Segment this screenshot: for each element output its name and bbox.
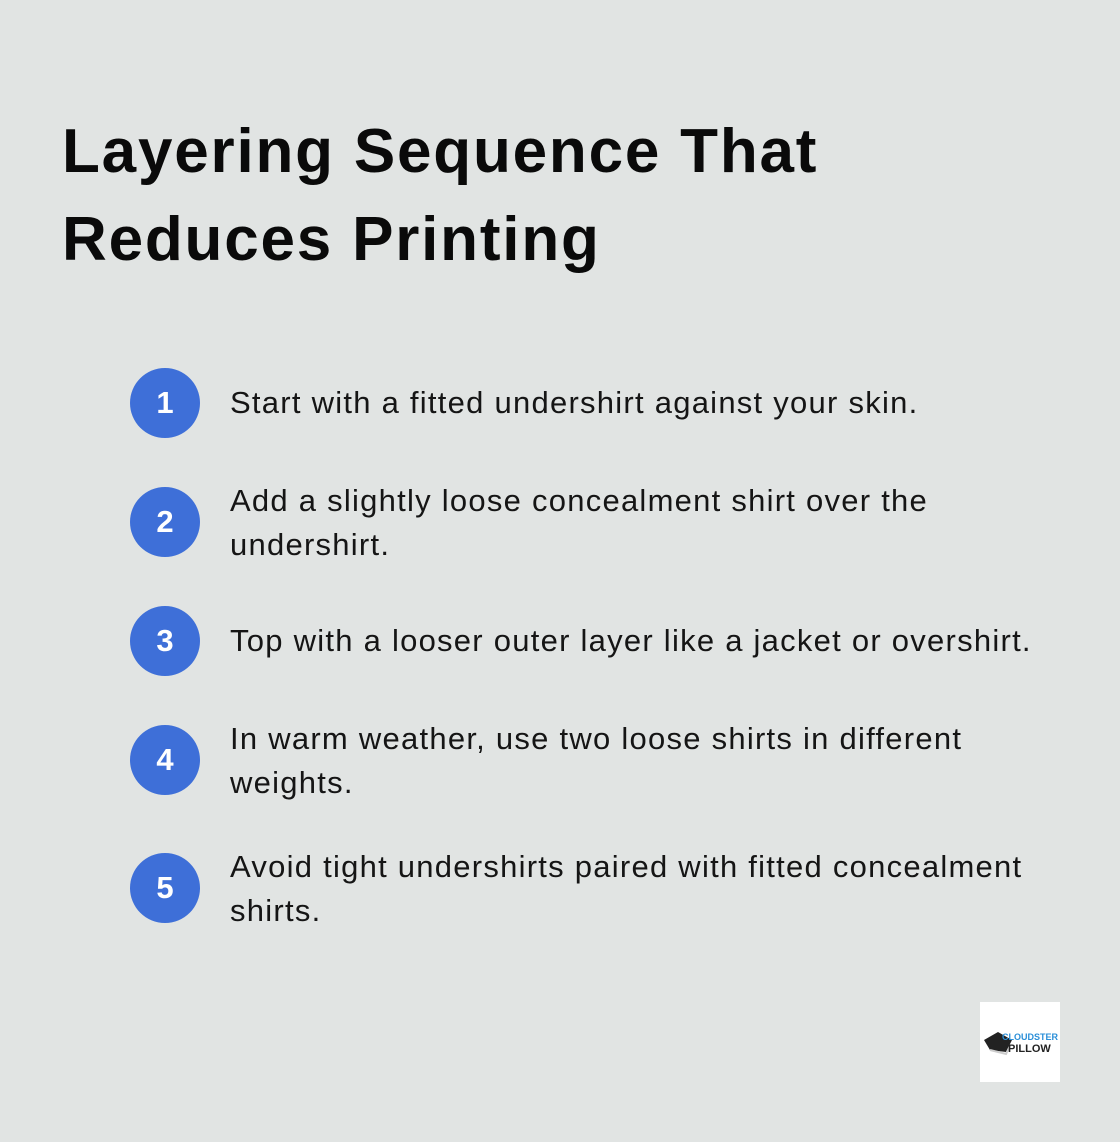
item 5 [130,849,1022,928]
icon: pillow [984,1032,1012,1054]
text 2: undershirt. [230,527,390,562]
number badge 4 [130,725,200,795]
item 1 [130,368,918,438]
logo text: PILLOW [1008,1043,1051,1055]
text 2 [230,483,928,562]
item 2 [130,483,928,562]
number badge 3 [130,606,200,676]
logo text: CLOUDSTER [1002,1032,1058,1042]
text 2: Add a slightly loose concealment shirt over the [230,483,928,518]
number badge 1: 1 [156,385,174,420]
item 4 [130,721,962,800]
number badge 2: 2 [156,504,174,539]
title: Reduces Printing [62,205,601,274]
text 4: weights. [230,765,354,800]
text 4 [230,721,962,800]
text 5: Avoid tight undershirts paired with fitted concealment [230,849,1022,884]
text 1: Start with a fitted undershirt against your skin. [230,385,918,420]
text 4: In warm weather, use two loose shirts in different [230,721,962,756]
item 3 [130,606,1032,676]
text 5 [230,849,1022,928]
number badge 5: 5 [156,870,174,905]
text 5: shirts. [230,893,321,928]
number badge 5 [130,853,200,923]
title: Layering Sequence That [62,117,818,186]
number badge 1 [130,368,200,438]
number badge 4: 4 [156,742,174,777]
number badge 3: 3 [156,623,174,658]
logo text [1002,1032,1058,1055]
logo [980,1002,1060,1082]
title [62,117,818,274]
number badge 2 [130,487,200,557]
text 3: Top with a looser outer layer like a jacket or overshirt. [230,623,1032,658]
